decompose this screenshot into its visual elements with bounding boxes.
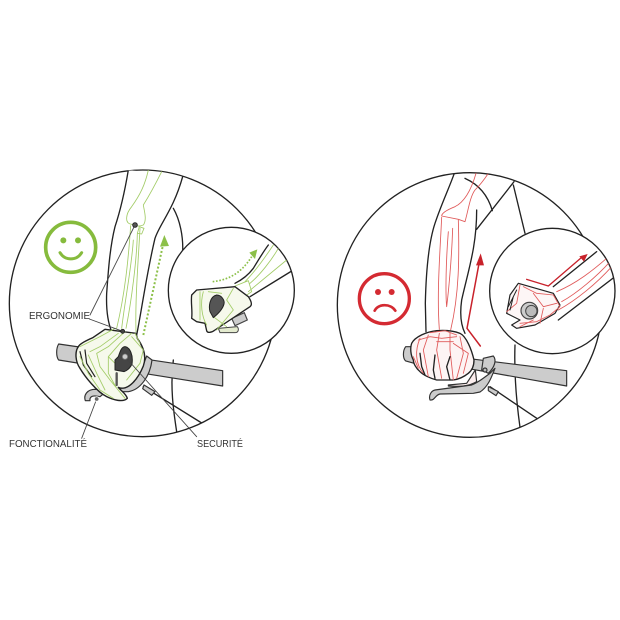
- main circle: [337, 173, 602, 437]
- forearm bones: [117, 170, 162, 332]
- fist: [411, 330, 474, 380]
- inset dotted arrow: [213, 257, 252, 282]
- handlebar: [57, 344, 223, 386]
- panel: bad grip: [337, 173, 615, 437]
- hand: [76, 328, 145, 401]
- arm and body outline: [107, 170, 271, 432]
- brake lever: [85, 356, 152, 401]
- arm and body outline: [424, 174, 538, 427]
- callout lines: [82, 223, 197, 438]
- arrow: red: [467, 253, 484, 346]
- inset red arrow: [527, 257, 582, 286]
- inset grip end: [521, 302, 538, 319]
- sad face: [359, 274, 409, 324]
- label: fonctionalité: FONCTIONALITÉ: [9, 437, 87, 450]
- label: sécurité: SECURITÉ: [197, 437, 243, 450]
- label: ergonomie: ERGONOMIE: [29, 311, 90, 322]
- inset forearm: [553, 252, 615, 320]
- inset grip: [232, 313, 247, 326]
- inset fist: [507, 283, 560, 328]
- smiley: [46, 222, 96, 272]
- arrow: dotted green: [143, 235, 169, 335]
- forearm bones: [438, 173, 488, 330]
- inset circle: [168, 227, 294, 353]
- inset forearm: [235, 245, 293, 297]
- handlebar and lever: [403, 347, 567, 400]
- main circle: [9, 170, 276, 437]
- inset circle: [490, 228, 615, 354]
- panel: good grip: [9, 170, 294, 438]
- inset hand: [191, 287, 251, 332]
